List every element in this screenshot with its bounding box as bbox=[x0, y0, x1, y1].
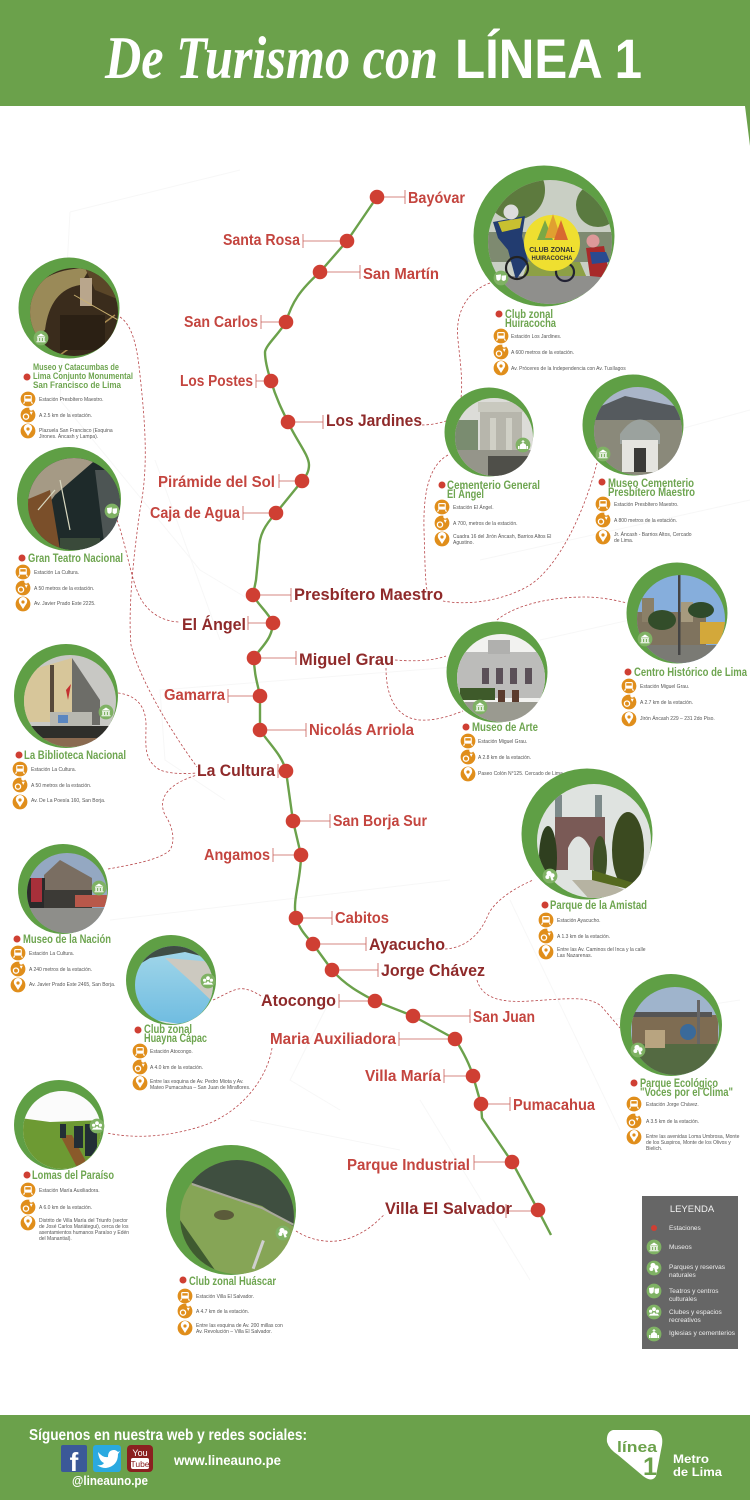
station: San Borja Sur bbox=[286, 813, 427, 830]
station: Bayóvar bbox=[370, 190, 465, 207]
legend panel: Parques y reservas bbox=[669, 1264, 726, 1271]
details: station, distance, address: Estación La Cultura. bbox=[31, 767, 76, 773]
station: San Martín: San Martín bbox=[363, 266, 439, 283]
details: station, distance, address: Estación El Ángel. bbox=[453, 504, 494, 511]
station: Santa Rosa bbox=[223, 232, 354, 249]
icon: facebook bbox=[61, 1445, 87, 1477]
details: station, distance, address bbox=[16, 565, 96, 611]
legend panel: Clubes y espacios bbox=[669, 1309, 722, 1316]
details: station, distance, address bbox=[21, 1183, 129, 1242]
station: Santa Rosa: Santa Rosa bbox=[223, 232, 300, 249]
details: station, distance, address: Estación Los Jardines. bbox=[511, 334, 561, 340]
legend panel: Teatros y centros bbox=[669, 1288, 719, 1295]
details: station, distance, address: Estación Miguel Grau. bbox=[640, 684, 689, 690]
station: Villa María: Villa María bbox=[365, 1068, 441, 1085]
station: Bayóvar: Bayóvar bbox=[408, 190, 465, 207]
header band bbox=[0, 0, 750, 146]
station: Los Jardines bbox=[281, 412, 422, 430]
station: Ayacucho bbox=[306, 936, 445, 954]
station: Maria Auxiliadora bbox=[270, 1031, 462, 1048]
title: Club zonal bbox=[505, 309, 553, 321]
title: Lomas del Paraíso bbox=[32, 1170, 114, 1182]
photo: cemetery bbox=[455, 398, 533, 476]
badge: museum bbox=[638, 632, 652, 646]
details: station, distance, address: Estación Atocongo. bbox=[150, 1049, 193, 1055]
icon: twitter bbox=[93, 1445, 121, 1472]
station: Cabitos bbox=[289, 910, 389, 927]
station: Pirámide del Sol: Pirámide del Sol bbox=[158, 474, 275, 491]
panel: Parque de la Amistad bbox=[522, 768, 653, 959]
logo: Línea 1 Metro de Lima bbox=[607, 1430, 722, 1481]
details: station, distance, address: A 6.0 km de la estación. bbox=[39, 1205, 92, 1211]
photo: plaza bbox=[637, 575, 725, 663]
details: station, distance, address: Av. Próceres de la Independencia con Av. Tusílagos bbox=[511, 366, 626, 372]
details: station, distance, address bbox=[596, 497, 692, 544]
title: Cementerio General bbox=[447, 480, 540, 492]
details: station, distance, address: Jirón Áncash 229 – 231 2do Piso. bbox=[640, 715, 715, 722]
badge: museum bbox=[596, 447, 610, 461]
metro line route bbox=[253, 197, 551, 1235]
panel: Museo y Catacumbas bbox=[18, 258, 133, 440]
title: Museo de la Nación bbox=[23, 934, 111, 946]
legend panel: Iglesias y cementerios bbox=[669, 1330, 736, 1337]
panel: Parque Ecológico Voces por el Clima bbox=[620, 974, 740, 1152]
badge: parks bbox=[631, 1043, 645, 1057]
panel: Gran Teatro Nacional bbox=[16, 447, 123, 611]
details: station, distance, address: Agustino. bbox=[453, 540, 474, 546]
photo: park arch bbox=[535, 782, 653, 900]
badge: theatres bbox=[494, 271, 508, 285]
station: Gamarra: Gamarra bbox=[164, 687, 225, 704]
title: Museo Cementerio bbox=[608, 478, 694, 490]
station: Maria Auxiliadora: Maria Auxiliadora bbox=[270, 1031, 396, 1048]
details: station, distance, address: Estación Jorge Chávez. bbox=[646, 1102, 699, 1108]
legend panel: naturales bbox=[669, 1272, 696, 1279]
station: San Juan: San Juan bbox=[473, 1009, 535, 1026]
details: station, distance, address bbox=[539, 913, 646, 959]
station: Villa María bbox=[365, 1068, 480, 1085]
details: station, distance, address: A 2.5 km de la estación. bbox=[39, 413, 92, 419]
details: station, distance, address: Entre las Av. Caminos del Inca y la calle bbox=[557, 947, 646, 953]
badge: parks bbox=[543, 869, 557, 883]
station: Nicolás Arriola: Nicolás Arriola bbox=[309, 722, 414, 739]
details: station, distance, address bbox=[622, 679, 715, 726]
station: Presbítero Maestro: Presbítero Maestro bbox=[294, 586, 443, 604]
details: station, distance, address: Estación Presbítero Maestro. bbox=[614, 502, 678, 508]
logo: Línea 1 Metro de Lima: 1 bbox=[643, 1453, 657, 1481]
title: Huayna Cápac bbox=[144, 1033, 207, 1045]
badge: clubs bbox=[90, 1119, 104, 1133]
details: station, distance, address: Estación La Cultura. bbox=[29, 951, 74, 957]
dashed connectors between stations and attractions bbox=[107, 283, 627, 1241]
title: Museo y Catacumbas de bbox=[33, 362, 119, 372]
details: station, distance, address: A 700, metros de la estación. bbox=[453, 521, 517, 527]
photo: theatre bbox=[26, 456, 122, 552]
title: Presbítero Maestro bbox=[608, 487, 695, 499]
details: station, distance, address: Mateo Pumacahua – San Juan de Miraflores. bbox=[150, 1085, 250, 1091]
badge: parks bbox=[276, 1226, 290, 1240]
station: Los Jardines: Los Jardines bbox=[326, 412, 422, 430]
details: station, distance, address bbox=[133, 1044, 250, 1091]
details: station, distance, address bbox=[494, 329, 626, 375]
station: Nicolás Arriola bbox=[253, 722, 414, 739]
details: station, distance, address: Entre las esquina de Av. 200 millas con bbox=[196, 1323, 283, 1329]
photo: catacombs bbox=[28, 266, 120, 358]
social handle: @lineauno.pe bbox=[72, 1474, 148, 1488]
title bbox=[134, 1024, 207, 1045]
station: Angamos bbox=[204, 847, 308, 864]
station: Villa El Salvador: Villa El Salvador bbox=[385, 1200, 513, 1218]
icon: youtube bbox=[127, 1445, 153, 1472]
title: LÍNEA 1 bbox=[455, 27, 642, 90]
title: La Biblioteca Nacional bbox=[24, 750, 126, 762]
title: Club zonal Huáscar bbox=[189, 1276, 276, 1288]
details: station, distance, address: Distrito de Villa María del Triunfo (sector bbox=[39, 1218, 128, 1224]
station: Gamarra bbox=[164, 687, 267, 704]
logo: Línea 1 Metro de Lima: de Lima bbox=[673, 1465, 722, 1479]
badge: clubs bbox=[201, 974, 215, 988]
legend panel: recreativos bbox=[669, 1317, 702, 1324]
title: San Francisco de Lima bbox=[33, 380, 121, 390]
details: station, distance, address: Paseo Colón N°125. Cercado de Lima. bbox=[478, 771, 564, 777]
title bbox=[630, 1078, 733, 1099]
details: station, distance, address: Entre las avenidas Loma Umbrosa, Monte bbox=[646, 1134, 740, 1140]
details: station, distance, address bbox=[11, 946, 115, 992]
title: Parque de la Amistad bbox=[550, 900, 647, 912]
legend panel: Museos bbox=[669, 1244, 693, 1251]
details: station, distance, address: A 3.5 km de la estación. bbox=[646, 1119, 699, 1125]
station: Parque Industrial: Parque Industrial bbox=[347, 1157, 470, 1174]
details: station, distance, address: A 4.0 km de la estación. bbox=[150, 1065, 203, 1071]
badge: museum bbox=[34, 331, 48, 345]
station: El Ángel bbox=[182, 615, 280, 634]
title: "Voces por el Clima" bbox=[640, 1087, 733, 1099]
legend panel: Estaciones bbox=[669, 1225, 702, 1232]
station: El Ángel: El Ángel bbox=[182, 615, 246, 634]
title bbox=[598, 478, 695, 499]
details: station, distance, address: A 2.8 km de la estación. bbox=[478, 755, 531, 761]
title: De Turismo con bbox=[104, 25, 438, 91]
title: El Ángel bbox=[447, 488, 484, 501]
details: station, distance, address: A 2.7 km de la estación. bbox=[640, 700, 693, 706]
details: station, distance, address bbox=[21, 392, 113, 440]
details: station, distance, address: Jirones. Áncash y Lampa). bbox=[39, 433, 98, 440]
photo: eco park bbox=[631, 987, 719, 1075]
details: station, distance, address: Av. Revolución – Villa El Salvador. bbox=[196, 1329, 272, 1335]
details: station, distance, address: de Lima. bbox=[614, 538, 633, 544]
details: station, distance, address: Estación Villa El Salvador. bbox=[196, 1294, 254, 1300]
icon: youtube: You bbox=[132, 1448, 148, 1458]
badge: museum bbox=[92, 881, 106, 895]
details: station, distance, address: A 1.3 km de la estación. bbox=[557, 934, 610, 940]
details: station, distance, address: Av. Javier Prado Este 2465, San Borja. bbox=[29, 982, 115, 988]
title bbox=[24, 362, 133, 390]
station: Jorge Chávez: Jorge Chávez bbox=[381, 962, 485, 980]
details: station, distance, address: Estación María Auxiliadora. bbox=[39, 1188, 100, 1194]
footer heading: Síguenos en nuestra web y redes sociales: bbox=[29, 1427, 307, 1444]
title: Parque Ecológico bbox=[640, 1078, 718, 1090]
details: station, distance, address: A 4.7 km de la estación. bbox=[196, 1309, 249, 1315]
footer band bbox=[0, 1415, 750, 1500]
station: San Carlos: San Carlos bbox=[184, 314, 258, 331]
logo: Línea 1 Metro de Lima: Metro bbox=[673, 1452, 709, 1466]
badge: theatres bbox=[105, 504, 119, 518]
station: Ayacucho: Ayacucho bbox=[369, 936, 445, 954]
details: station, distance, address: Bielich. bbox=[646, 1146, 662, 1152]
details: station, distance, address: Estación Ayacucho. bbox=[557, 918, 601, 924]
station: Caja de Agua: Caja de Agua bbox=[150, 505, 240, 522]
photo: mausoleum bbox=[592, 385, 684, 477]
station: La Cultura: La Cultura bbox=[197, 762, 276, 780]
station: San Juan bbox=[406, 1009, 535, 1026]
details: station, distance, address: de José Carlos Mariátegui), cerca de los bbox=[39, 1224, 129, 1230]
details: station, distance, address: A 240 metros de la estación. bbox=[29, 967, 92, 973]
photo: BMX riders bbox=[488, 180, 612, 304]
photo: swimming pool bbox=[135, 946, 213, 1024]
details: station, distance, address: A 50 metros de la estación. bbox=[31, 783, 91, 789]
details: station, distance, address bbox=[178, 1289, 283, 1335]
title: Huiracocha bbox=[505, 318, 556, 330]
station: San Borja Sur: San Borja Sur bbox=[333, 813, 427, 830]
legend panel: LEYENDA bbox=[670, 1204, 715, 1215]
title bbox=[438, 480, 540, 501]
icon: youtube: Tube bbox=[130, 1459, 150, 1469]
panel: Cementerio General El Ángel bbox=[435, 388, 551, 546]
title bbox=[496, 309, 556, 330]
details: station, distance, address: A 50 metros de la estación. bbox=[34, 586, 94, 592]
website: www.lineauno.pe bbox=[173, 1452, 281, 1468]
badge: churches bbox=[516, 438, 530, 452]
photo: lagoon aerial bbox=[178, 1158, 296, 1276]
details: station, distance, address bbox=[461, 734, 564, 781]
icon: facebook: f bbox=[70, 1447, 79, 1477]
panel: Lomas del Paraíso bbox=[14, 1080, 129, 1242]
station: Cabitos: Cabitos bbox=[335, 910, 389, 927]
details: station, distance, address: Las Nazarenas. bbox=[557, 953, 592, 959]
station: Pumacahua: Pumacahua bbox=[513, 1097, 595, 1114]
panel: Museo Cementerio Presbítero Maestro bbox=[582, 374, 695, 544]
station: Parque Industrial bbox=[347, 1155, 519, 1174]
details: station, distance, address: Entre las esquina de Av. Pedro Miota y Av. bbox=[150, 1079, 244, 1085]
title: Gran Teatro Nacional bbox=[28, 553, 123, 565]
station: San Martín bbox=[313, 265, 439, 283]
logo: Línea 1 Metro de Lima: línea bbox=[617, 1439, 658, 1456]
photo: museum facade bbox=[457, 634, 545, 722]
station: Miguel Grau: Miguel Grau bbox=[299, 651, 394, 669]
title: Club zonal bbox=[144, 1024, 192, 1036]
panel: Club zonal Huáscar bbox=[166, 1145, 296, 1335]
details: station, distance, address: del Manantial). bbox=[39, 1236, 72, 1242]
details: station, distance, address: asentamientos humanos Paraíso y Edén bbox=[39, 1230, 129, 1236]
details: station, distance, address: Cuadra 16 del Jirón Áncash, Barrios Altos El bbox=[453, 533, 551, 540]
photo: library bbox=[22, 654, 118, 750]
details: station, distance, address: A 600 metros de la estación. bbox=[511, 350, 574, 356]
details: station, distance, address: Av. De La Poesía 160, San Borja. bbox=[31, 798, 105, 804]
photo: BMX riders: HUIRACOCHA bbox=[532, 256, 573, 262]
details: station, distance, address: Estación La Cultura. bbox=[34, 570, 79, 576]
details: station, distance, address: Estación Miguel Grau. bbox=[478, 739, 527, 745]
title: Museo de Arte bbox=[472, 722, 538, 734]
title: Lima Conjunto Monumental bbox=[33, 371, 133, 381]
details: station, distance, address bbox=[435, 500, 551, 546]
details: station, distance, address: A 800 metros de la estación. bbox=[614, 518, 677, 524]
station: Los Postes: Los Postes bbox=[180, 373, 253, 390]
details: station, distance, address: de los Suspiros, Monte de los Olivos y bbox=[646, 1140, 731, 1146]
details: station, distance, address bbox=[13, 762, 105, 809]
details: station, distance, address: Av. Javier Prado Este 2225. bbox=[34, 601, 96, 607]
details: station, distance, address: Estación Presbítero Maestro. bbox=[39, 397, 103, 403]
details: station, distance, address bbox=[627, 1097, 740, 1152]
station: Jorge Chávez bbox=[325, 962, 485, 980]
panel: Museo de Arte bbox=[446, 622, 564, 781]
panel: Club zonal Huiracocha bbox=[474, 160, 626, 375]
panel: Centro Histórico de Lima bbox=[622, 562, 747, 726]
station: Pumacahua bbox=[474, 1097, 595, 1114]
photo: BMX riders: CLUB ZONAL bbox=[529, 247, 575, 254]
legend panel bbox=[642, 1196, 738, 1349]
badge: museum bbox=[99, 705, 113, 719]
panel: La Biblioteca Nacional bbox=[13, 644, 126, 809]
panel: Museo de la Nación bbox=[11, 844, 115, 992]
details: station, distance, address: Jr. Áncash - Barrios Altos, Cercado bbox=[614, 531, 692, 538]
panel: Club zonal Huayna Cápac bbox=[126, 935, 250, 1091]
legend panel: culturales bbox=[669, 1296, 698, 1303]
photo: hikers on hill bbox=[23, 1091, 101, 1169]
details: station, distance, address: Plazuela San Francisco (Esquina bbox=[39, 428, 113, 434]
station: Angamos: Angamos bbox=[204, 847, 270, 864]
photo: museum building bbox=[27, 853, 107, 933]
station: Atocongo: Atocongo bbox=[261, 992, 336, 1010]
station: Atocongo bbox=[261, 992, 382, 1010]
station: Miguel Grau bbox=[247, 651, 394, 669]
badge: museum bbox=[473, 700, 487, 714]
